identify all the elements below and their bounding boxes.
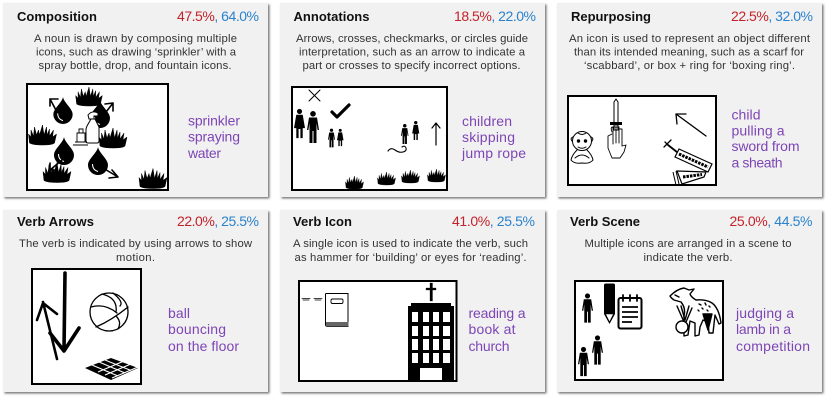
panel: Annotations (280, 3, 545, 197)
stats: Verb Scene: 25.0%, 44.5% (730, 213, 812, 229)
description: Verb Scene: Multiple icons are arranged in a scene to (584, 238, 792, 250)
label: reading a book at church: book at (468, 321, 516, 337)
label: sprinkler spraying water: sprinkler (188, 112, 240, 128)
description: Annotations: Arrows, crosses, checkmarks, or circles guide (296, 33, 528, 45)
description: Repurposing: ‘scabbard’, or box + ring for ‘boxing ring’. (584, 60, 795, 72)
heading: Repurposing: Repurposing (571, 9, 651, 24)
label: child pulling a sword from a sheath: pulling a (732, 122, 785, 138)
stats: Verb Icon: 41.0%, 25.5% (452, 213, 535, 229)
stats: Composition: 47.5%, 64.0% (177, 8, 259, 24)
label: child pulling a sword from a sheath: sword from (732, 138, 800, 154)
description: Annotations: interpretation, such as an arrow to indicate a (299, 46, 526, 58)
heading: Verb Icon: Verb Icon (293, 214, 352, 229)
description: Annotations: part or crosses to specify incorrect options. (302, 60, 520, 72)
label: children skipping jump rope: skipping (462, 129, 515, 145)
label: sprinkler spraying water (187, 112, 240, 161)
label: judging a lamb in a competition: lamb in a (736, 321, 791, 337)
heading: Annotations: Annotations (294, 9, 370, 24)
label: judging a lamb in a competition: judging a (735, 305, 794, 321)
description: Verb Arrows: The verb is indicated by using arrows to show (19, 238, 253, 250)
illustration: children skipping jump rope (292, 87, 447, 190)
description: Composition: spray bottle, drop, and fountain icons. (38, 60, 232, 72)
illustration: sprinkler spraying water (27, 84, 168, 190)
description: Verb Scene: indicate the verb. (644, 252, 732, 264)
stats: Annotations: 18.5%, 22.0% (454, 8, 536, 24)
description: Composition: A noun is drawn by composing multiple (34, 33, 237, 45)
label: children skipping jump rope (461, 113, 526, 161)
stats: Repurposing: 22.5%, 32.0% (731, 8, 813, 24)
panel: Composition (3, 3, 268, 197)
description: Repurposing: An icon is used to represent an object different (569, 33, 811, 45)
panel: Verb Icon (280, 210, 545, 392)
description: Verb Arrows: motion. (116, 252, 155, 264)
heading: Verb Arrows: Verb Arrows (17, 214, 94, 229)
label: ball bouncing on the floor: bouncing (168, 321, 226, 337)
description: Repurposing (569, 33, 811, 72)
label: children skipping jump rope: children (462, 113, 512, 129)
description: Verb Scene (584, 238, 792, 264)
description: Repurposing: than its intended meaning, such as a scarf for (574, 46, 804, 58)
label: reading a book at church: church (468, 338, 510, 354)
label: sprinkler spraying water: water (187, 145, 221, 161)
description: Composition: icons, such as drawing ‘sprinkler’ with a (36, 46, 237, 58)
label: children skipping jump rope: jump rope (461, 145, 526, 161)
label: judging a lamb in a competition: competition (736, 338, 810, 354)
heading: Verb Scene: Verb Scene (570, 214, 640, 229)
description: Annotations (296, 33, 528, 72)
description: Composition (34, 33, 237, 72)
panel: Repurposing (557, 3, 822, 197)
label: ball bouncing on the floor (168, 305, 239, 354)
label: child pulling a sword from a sheath: a sheath (732, 154, 782, 170)
label: judging a lamb in a competition (735, 305, 810, 354)
description: Verb Icon: as hammer for ‘building’ or eyes for ‘reading’. (294, 252, 526, 264)
illustration: child pulling a sword from a sheath (568, 96, 716, 185)
heading: Composition: Composition (17, 9, 97, 24)
label: sprinkler spraying water: spraying (188, 128, 240, 144)
label: reading a book at church: reading a (468, 305, 526, 321)
label: child pulling a sword from a sheath: child (732, 106, 760, 122)
description: Verb Arrows (19, 238, 253, 264)
illustration: judging a lamb in a competition (575, 281, 723, 380)
description: Verb Icon (293, 238, 528, 264)
panel: Verb Arrows (3, 210, 268, 392)
label: ball bouncing on the floor: on the floor (168, 338, 239, 354)
label: child pulling a sword from a sheath (732, 106, 800, 170)
stats: Verb Arrows: 22.0%, 25.5% (177, 213, 259, 229)
illustration: ball bouncing on the floor (32, 269, 141, 384)
label: reading a book at church (468, 305, 526, 354)
panel: Verb Scene (557, 210, 822, 392)
description: Verb Icon: A single icon is used to indicate the verb, such (293, 238, 528, 250)
illustration: reading a book at church (299, 281, 456, 381)
label: ball bouncing on the floor: ball (168, 305, 190, 321)
